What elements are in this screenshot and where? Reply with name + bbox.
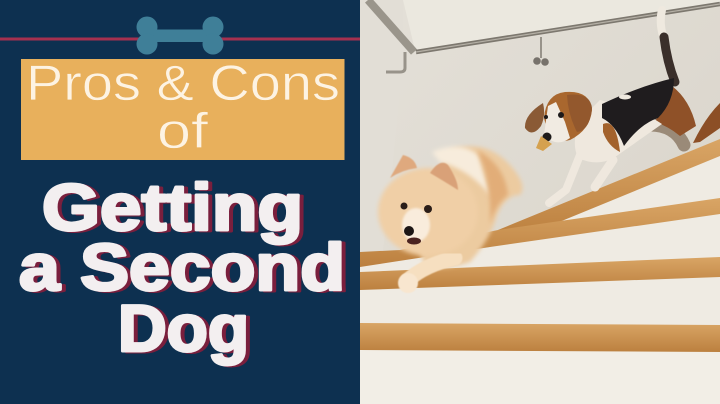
left ear (525, 103, 544, 133)
upper stair tread (498, 139, 720, 238)
brown shoulder patch (603, 123, 620, 152)
divider line with bone (0, 16, 360, 54)
beagle (525, 10, 720, 203)
heading shadow: Dog (122, 292, 253, 366)
heading face: Getting (42, 170, 303, 244)
paw (398, 273, 418, 293)
panel: photo of two dogs on stairs (360, 0, 720, 404)
subtitle text: Pros & Cons (26, 55, 340, 111)
heading shadow: a Second (23, 231, 349, 305)
white back spot (619, 94, 631, 100)
ceiling (403, 0, 720, 50)
orange back streak (477, 150, 508, 225)
head (544, 92, 592, 141)
eyes, nose and mouth (400, 202, 432, 244)
belly (650, 125, 684, 145)
icon: bone (136, 16, 224, 54)
third stair tread (360, 257, 720, 290)
hind leg (655, 86, 696, 136)
muzzle (402, 208, 430, 242)
eyes and nose (542, 112, 564, 142)
heading face (19, 170, 345, 365)
pomeranian (378, 146, 522, 293)
panel: orange subtitle box (21, 59, 344, 160)
front leg (408, 258, 455, 280)
stairs (360, 139, 720, 404)
tail (661, 10, 663, 36)
heading shadow: Getting (46, 171, 307, 245)
side wall (360, 0, 403, 252)
ears (390, 155, 417, 178)
subtitle text (26, 55, 340, 159)
heading: Getting a Second Dog (19, 170, 349, 366)
bracket knobs (533, 57, 549, 66)
fluffy body (410, 146, 522, 268)
subtitle text: of (157, 103, 208, 159)
white back (432, 147, 490, 195)
toy in mouth (536, 136, 552, 151)
second stair tread (360, 198, 720, 267)
black saddle (602, 78, 674, 146)
white chest and belly (575, 100, 662, 162)
front legs (549, 155, 580, 203)
white risers (360, 155, 720, 404)
heading shadow (23, 171, 349, 366)
heading face: Dog (118, 291, 249, 365)
head ruff (378, 168, 478, 256)
right ear (567, 95, 592, 132)
heading face: a Second (19, 230, 345, 304)
handrail (368, 0, 720, 72)
blaze and muzzle (544, 102, 570, 142)
fourth stair tread (360, 323, 720, 352)
panel: navy title background (0, 0, 360, 404)
far hind leg (693, 103, 720, 143)
